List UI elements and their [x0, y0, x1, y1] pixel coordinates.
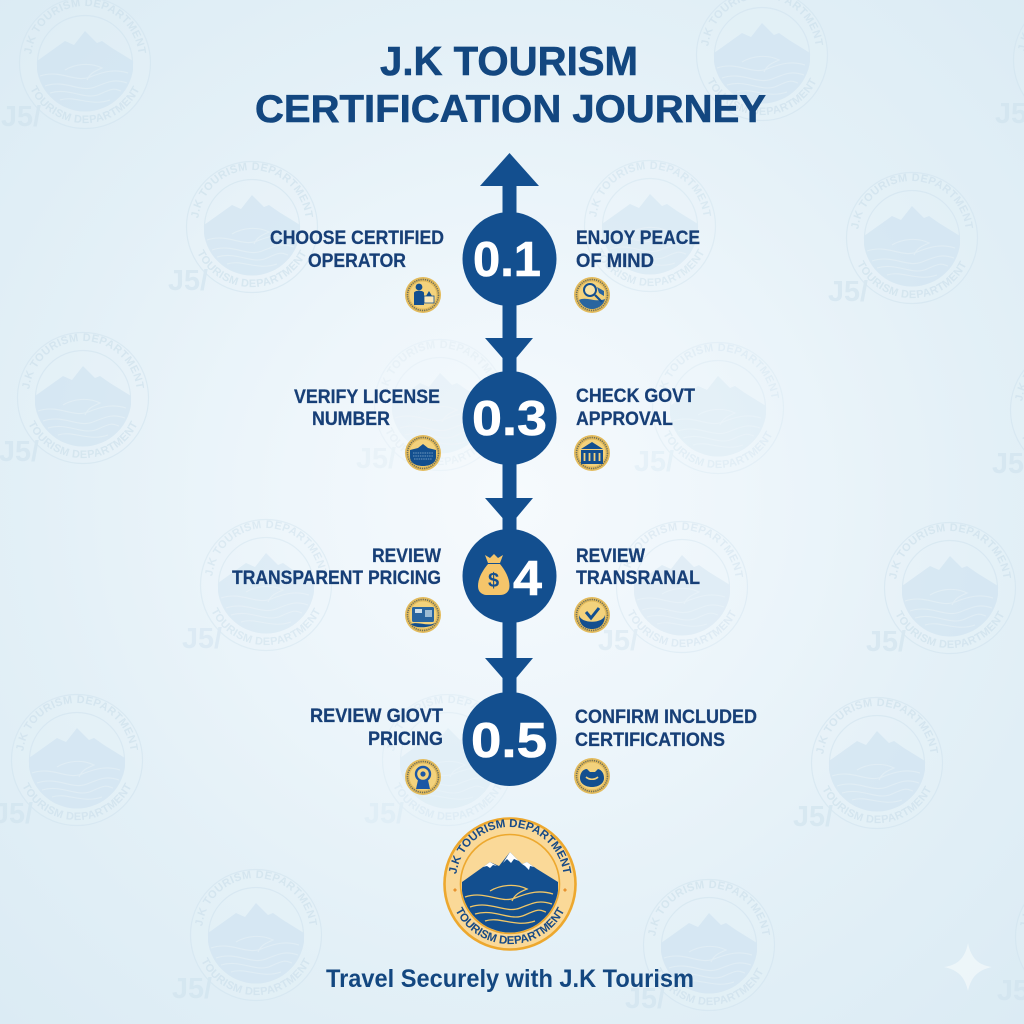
background watermarks: TOURISM DEPARTMENT [32, 85, 138, 123]
background watermarks: TOURISM DEPARTMENT [202, 957, 310, 995]
label: enjoy peace of mind: OF MIND [576, 251, 654, 272]
label: review giovt pricing [310, 706, 443, 750]
step circle 4 with money bag: 4 [513, 552, 542, 606]
arrow: top arrowhead [480, 153, 539, 186]
background watermarks: TOURISM DEPARTMENT [628, 609, 736, 647]
background watermarks: J.K TOURISM DEPARTMENT [816, 698, 938, 754]
background watermarks: TOURISM DEPARTMENT [24, 782, 130, 820]
background watermarks: J5/ [793, 801, 833, 833]
label: review transparent pricing: TRANSPARENT PRICING [232, 568, 441, 589]
background watermarks: TOURISM DEPARTMENT [824, 785, 930, 823]
label: check govt approval [576, 386, 695, 430]
background watermarks: J5/ [356, 443, 396, 475]
background watermarks: TOURISM DEPARTMENT [212, 607, 320, 645]
background watermarks: J.K TOURISM DEPARTMENT [851, 174, 973, 229]
background watermarks: TOURISM DEPARTMENT [386, 428, 477, 465]
label: review transranal: TRANSRANAL [576, 568, 700, 589]
background watermarks: J5/ [634, 446, 674, 478]
background watermarks: J5/ [172, 973, 212, 1005]
background watermarks: J.K TOURISM DEPARTMENT [205, 520, 327, 576]
icon: operator badge [405, 277, 441, 313]
background watermarks: J5/ [364, 798, 404, 830]
label: enjoy peace of mind [576, 228, 700, 272]
label: enjoy peace of mind: ENJOY PEACE [576, 228, 700, 249]
background watermarks: J5/ [625, 983, 665, 1015]
background watermarks: J.K TOURISM DEPARTMENT [195, 870, 317, 926]
background watermarks: J5/ [598, 625, 638, 657]
journey spine with arrows [480, 153, 539, 740]
background watermarks: TOURISM DEPARTMENT [198, 249, 306, 287]
title [255, 38, 766, 131]
background watermarks: TOURISM DEPARTMENT [656, 967, 762, 1005]
background watermarks: J.K TOURISM DEPARTMENT [384, 342, 494, 394]
icon: rosette badge [405, 759, 441, 795]
background watermarks: TOURISM DEPARTMENT [598, 248, 704, 286]
step circle 0.1: 0.1 [473, 233, 541, 287]
footer tagline: Travel Securely with J.K Tourism [326, 965, 694, 993]
background watermarks: J.K TOURISM DEPARTMENT [589, 162, 711, 217]
label: choose certified operator: CHOOSE CERTIFIED [270, 228, 444, 249]
background watermarks: TOURISM DEPARTMENT [896, 610, 1004, 648]
icon: pricing card badge [405, 597, 441, 633]
label: verify license number: VERIFY LICENSE [294, 387, 440, 408]
background watermarks: J.K TOURISM DEPARTMENT [388, 696, 478, 751]
icon: certification badge [574, 758, 610, 794]
background watermarks: J.K TOURISM DEPARTMENT [22, 334, 144, 389]
background watermarks: J.K TOURISM DEPARTMENT [658, 344, 779, 398]
background watermarks: J.K TOURISM DEPARTMENT [889, 524, 1011, 579]
background watermarks: J5/ [182, 623, 222, 655]
step circle 0.3 [462, 371, 556, 465]
background watermarks: TOURISM DEPARTMENT [664, 430, 771, 468]
label: check govt approval: CHECK GOVT [576, 386, 695, 407]
background watermarks: TOURISM DEPARTMENT [708, 77, 816, 115]
step circle 0.3: 0.3 [472, 392, 547, 446]
background watermarks: J5/ [168, 265, 208, 297]
label: review giovt pricing: REVIEW GIOVT [310, 706, 443, 727]
label: confirm included certifications: CERTIFICATIONS [575, 730, 725, 751]
label: review giovt pricing: PRICING [368, 729, 443, 750]
step circle 4 with money bag [462, 529, 556, 623]
emblem: J.K Tourism Department seal [443, 817, 577, 951]
emblem: J.K Tourism Department seal: J.K TOURISM DEPARTMENT [448, 819, 572, 874]
background watermarks: J5/ [1, 101, 41, 133]
label: check govt approval: APPROVAL [576, 409, 673, 430]
background watermarks: TOURISM DEPARTMENT [30, 420, 136, 458]
step circle 0.5 [462, 692, 556, 786]
step circle 0.5: 0.5 [471, 714, 547, 768]
label: confirm included certifications [575, 707, 757, 751]
background watermarks: J.K TOURISM DEPARTMENT [16, 696, 138, 751]
label: review transranal: REVIEW [576, 546, 645, 567]
label: verify license number: NUMBER [312, 409, 390, 430]
step circle 0.1 [462, 212, 556, 306]
icon: license badge [405, 435, 441, 471]
background watermarks: J5/ [866, 626, 906, 658]
title: CERTIFICATION JOURNEY [255, 88, 766, 131]
label: choose certified operator: OPERATOR [308, 251, 406, 272]
label: review transparent pricing [232, 546, 441, 589]
label: review transranal [576, 546, 700, 589]
title: J.K TOURISM [380, 38, 638, 84]
emblem: J.K Tourism Department seal: TOURISM DEPARTMENT [456, 906, 564, 944]
icon: check badge [574, 597, 610, 633]
background watermarks: TOURISM DEPARTMENT [858, 260, 966, 298]
background watermarks: J.K TOURISM DEPARTMENT [191, 162, 313, 218]
background watermarks: J5/ [828, 276, 868, 308]
background watermarks: J.K TOURISM DEPARTMENT [621, 522, 743, 578]
step circle 4 with money bag: $ [488, 570, 499, 592]
label: review transparent pricing: REVIEW [372, 546, 441, 567]
label: choose certified operator [270, 228, 444, 272]
background watermarks: J5/ [0, 436, 39, 468]
label: confirm included certifications: CONFIRM INCLUDED [575, 707, 757, 728]
icon: magnifier badge [574, 277, 610, 313]
label: verify license number [294, 387, 440, 430]
icon: government building badge [574, 435, 610, 471]
background watermarks: TOURISM DEPARTMENT [394, 782, 501, 820]
background watermarks: J.K TOURISM DEPARTMENT [648, 880, 770, 936]
icon: sparkle [944, 943, 992, 991]
